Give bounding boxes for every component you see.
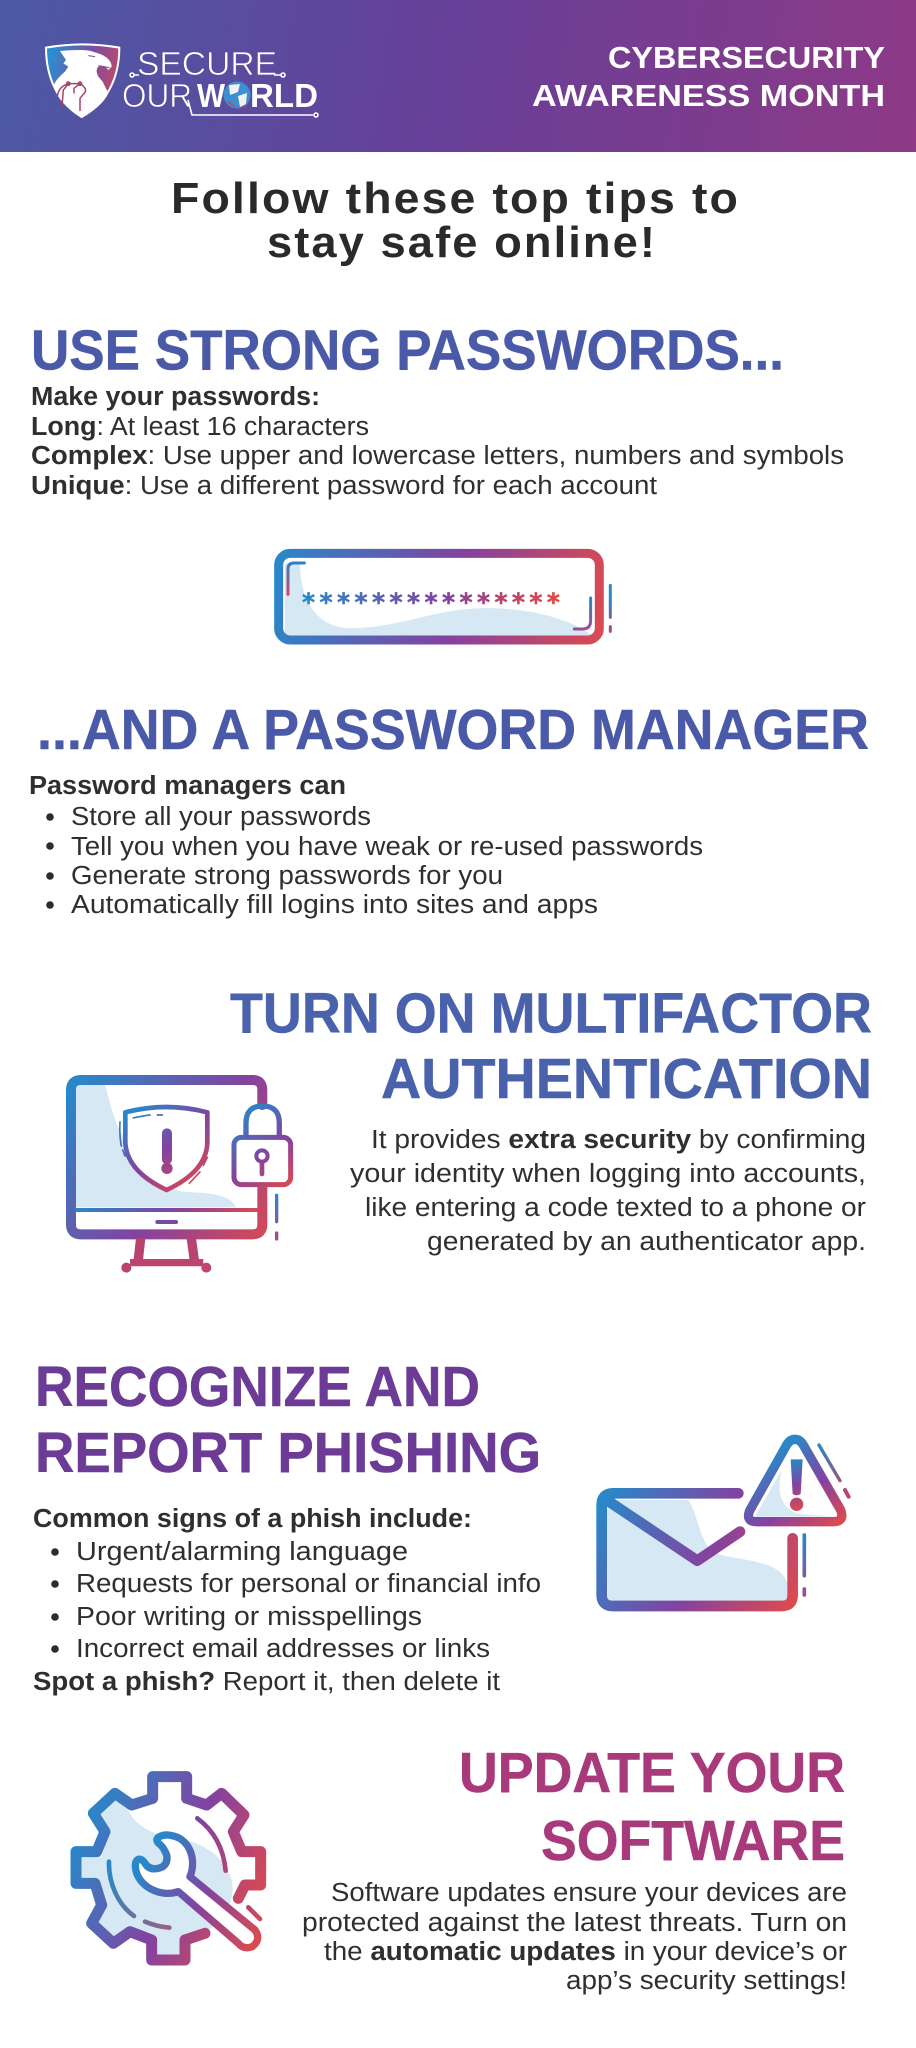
phishing signs list: Incorrect email addresses or links (76, 1635, 490, 1663)
multifactor description: generated by an authenticator app. (427, 1228, 866, 1256)
password manager list: Generate strong passwords for you (71, 862, 503, 890)
password rules text: Make your passwords: (31, 383, 320, 411)
heading: TURN ON MULTIFACTOR (230, 982, 872, 1046)
multifactor description: like entering a code texted to a phone or (365, 1194, 867, 1222)
multifactor description (350, 1126, 867, 1256)
multifactor description: your identity when logging into accounts, (350, 1160, 866, 1188)
phishing signs list: Spot a phish? Report it, then delete it (33, 1668, 500, 1696)
main title: Follow these top tips to (171, 174, 740, 223)
heading: UPDATE YOUR (459, 1741, 845, 1805)
software description: the automatic updates in your device’s or (324, 1938, 848, 1966)
password manager list: Store all your passwords (71, 803, 371, 831)
heading: SOFTWARE (541, 1809, 845, 1873)
header title (532, 40, 885, 113)
icon: envelope with warning triangle (602, 1439, 849, 1606)
logo wordmark: W (197, 77, 226, 114)
password manager list: Password managers can (29, 772, 346, 800)
logo: Secure Our World (46, 44, 318, 117)
header banner (0, 0, 916, 152)
software description: Software updates ensure your devices are (331, 1879, 847, 1907)
software description: protected against the latest threats. Turn on (302, 1909, 847, 1937)
logo wordmark: SECURE (137, 45, 277, 82)
main title (171, 174, 740, 267)
icon: password field: *************** (302, 588, 560, 617)
password rules text: Complex : Use upper and lowercase letters, numbers and symbols (31, 442, 844, 470)
heading: REPORT PHISHING (35, 1421, 541, 1485)
multifactor description: It provides extra security by confirming (371, 1126, 866, 1154)
section: multifactor authentication (230, 982, 872, 1256)
header title: AWARENESS MONTH (532, 78, 885, 113)
section: recognize and report phishing (33, 1355, 541, 1696)
heading (459, 1741, 845, 1873)
password rules text: Long: At least 16 characters (31, 413, 369, 441)
section: use strong passwords (31, 318, 844, 500)
password rules text: Unique : Use a different password for each account (31, 472, 657, 500)
phishing signs list (33, 1505, 541, 1696)
icon: monitor with shield and lock (71, 1080, 291, 1273)
heading: RECOGNIZE AND (35, 1355, 480, 1419)
phishing signs list: Urgent/alarming language (76, 1538, 408, 1566)
phishing signs list: Common signs of a phish include: (33, 1505, 472, 1533)
password manager list: Tell you when you have weak or re-used passwords (71, 833, 703, 861)
section: password manager (29, 698, 869, 919)
heading: USE STRONG PASSWORDS... (31, 318, 784, 382)
phishing signs list: Poor writing or misspellings (76, 1603, 422, 1631)
password rules text (31, 383, 844, 500)
header title: CYBERSECURITY (608, 40, 885, 75)
phishing signs list: Requests for personal or financial info (76, 1570, 541, 1598)
icon: gear with wrench (76, 1777, 261, 1960)
password manager list: Automatically fill logins into sites and apps (71, 891, 598, 919)
heading (35, 1355, 541, 1485)
heading: ...AND A PASSWORD MANAGER (37, 698, 869, 762)
software description (302, 1879, 848, 1995)
logo wordmark: OUR (122, 77, 192, 114)
section: update your software (302, 1741, 848, 1995)
icon: password field (279, 553, 610, 640)
main title: stay safe online! (267, 218, 657, 267)
logo wordmark: RLD (250, 77, 318, 114)
heading (230, 982, 872, 1111)
icon: eagle shield (46, 44, 119, 117)
password manager list (29, 772, 703, 919)
software description: app’s security settings! (566, 1967, 847, 1995)
heading: AUTHENTICATION (381, 1047, 872, 1111)
logo wordmark (122, 45, 318, 117)
